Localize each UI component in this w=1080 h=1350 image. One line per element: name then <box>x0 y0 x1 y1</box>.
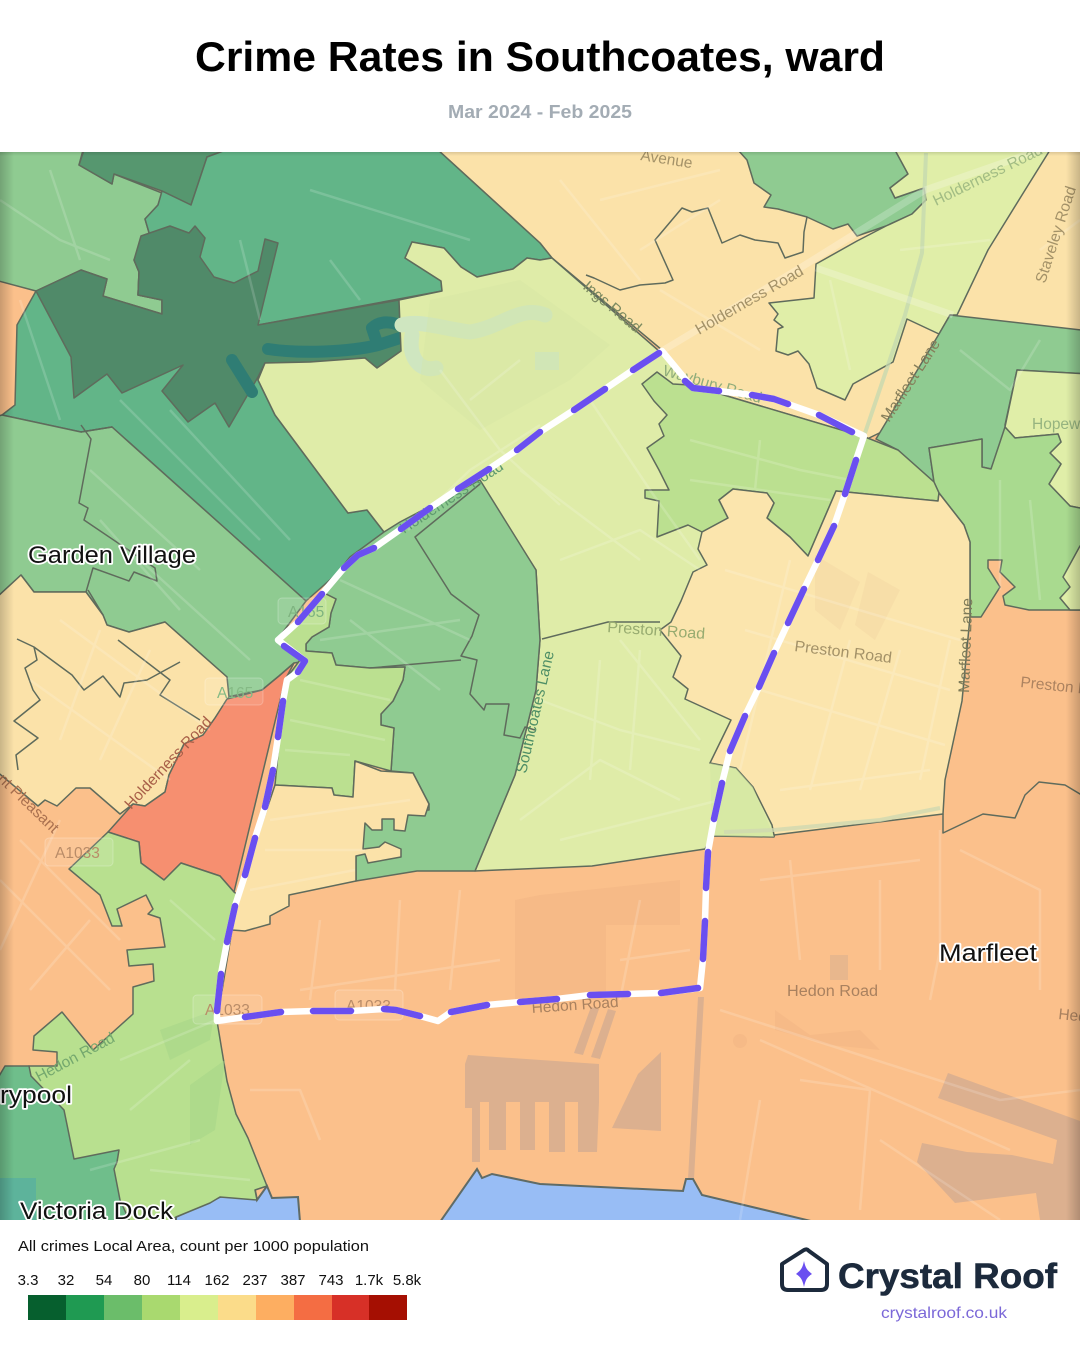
road labels: Marfleet Lane <box>956 598 976 693</box>
road labels: Holderness Road <box>930 142 1045 210</box>
legend scale labels: 5.8k <box>393 1272 422 1289</box>
road network <box>0 150 1080 1220</box>
legend scale labels: 80 <box>134 1272 150 1289</box>
legend colour swatches <box>28 1295 407 1320</box>
place labels: rypool <box>0 1082 72 1109</box>
road shield: A1033 middle: A1033 <box>346 998 391 1015</box>
road labels: Hedon Road <box>531 994 619 1017</box>
road labels: Avenue <box>639 147 694 172</box>
road shield: A1033 left <box>45 838 113 866</box>
road labels <box>0 142 1080 1086</box>
region: darkest green park core <box>36 226 401 427</box>
region: Garden Village light green <box>0 415 306 697</box>
legend scale labels: 1.7k <box>355 1272 384 1289</box>
Garden Village inner boundary <box>79 425 157 615</box>
region: ward west light green <box>275 592 405 797</box>
legend scale labels: 162 <box>204 1272 230 1289</box>
road shield: A1033 left: A1033 <box>55 845 100 862</box>
road labels: Hedon Road <box>33 1030 118 1086</box>
road shield: A165 upper <box>278 598 326 624</box>
road labels: Preston Road <box>794 638 893 667</box>
region: ward Preston Road boundary <box>542 622 660 639</box>
region: northern mid green <box>133 152 552 324</box>
place labels <box>0 542 1037 1225</box>
region: western mid green <box>2 291 384 601</box>
place labels: Garden Village <box>28 542 196 569</box>
region: south-west darker green patches <box>160 1010 225 1145</box>
road shield: A1033 junction: A1033 <box>205 1002 250 1019</box>
harbour structures on the peach area <box>465 955 1080 1220</box>
region: south-west mid green <box>0 1066 130 1222</box>
region: ward south pale darker band <box>710 763 774 837</box>
icon: house with star <box>782 1249 827 1290</box>
region: ward south-east cream <box>660 489 970 835</box>
park lake tint <box>402 313 545 369</box>
park darker meadow <box>421 305 559 376</box>
railway line through north-east <box>864 153 926 436</box>
legend scale labels: 387 <box>280 1272 306 1289</box>
top-left boundary to western mid green <box>81 427 112 432</box>
map base: peach high-crime area <box>0 152 1080 1220</box>
grey-green road along south boundary <box>724 808 940 832</box>
industrial block shading <box>515 880 880 1050</box>
road labels: Waybury Road <box>661 363 764 407</box>
legend title: All crimes Local Area, count per 1000 population <box>18 1239 369 1255</box>
region: NE light green block <box>738 150 926 236</box>
road labels: Hedon Road <box>787 983 878 1000</box>
lake in park core <box>232 322 400 392</box>
region: ward north light green <box>642 372 939 556</box>
ward boundary: white base line <box>217 351 864 1021</box>
website url: crystalroof.co.uk <box>881 1305 1008 1322</box>
region: central pale green <box>258 242 865 871</box>
region: west cream <box>0 575 229 814</box>
road labels: Marfleet Lane <box>878 336 944 425</box>
region: red-orange highest crime area <box>108 663 294 892</box>
legend scale labels: 237 <box>242 1272 268 1289</box>
region: northern internal cream boundary <box>586 208 807 290</box>
road labels: Holderness Road <box>397 458 507 537</box>
place labels: Marfleet <box>939 940 1037 967</box>
road shield: A165 upper: A165 <box>288 604 324 621</box>
road labels: Preston Road <box>607 619 706 643</box>
legend scale labels: 3.3 <box>18 1272 38 1289</box>
road shield: A165 lower: A165 <box>217 685 253 702</box>
region: ward cream pocket <box>232 761 429 931</box>
legend scale labels: 32 <box>58 1272 74 1289</box>
title: Crime Rates in Southcoates, ward <box>195 33 885 80</box>
region: Hopewell pale green <box>1005 370 1080 510</box>
place labels: Victoria Dock <box>20 1198 174 1225</box>
road labels: Ings Road <box>579 278 644 336</box>
region: dark green top piece <box>79 150 226 205</box>
ward internal boundary lines <box>370 484 535 738</box>
road labels: Holderness Road <box>692 263 807 338</box>
region: water, Humber estuary <box>176 1169 815 1222</box>
road shield: A1033 junction <box>193 995 262 1024</box>
ward boundary: purple dashes <box>217 353 856 1017</box>
region: ward mid green centre <box>306 480 540 881</box>
road shield: A1033 middle <box>335 990 403 1020</box>
region: east small pale block <box>1060 543 1080 610</box>
region: peach east wedge outline <box>943 782 1080 833</box>
legend scale labels: 54 <box>96 1272 112 1289</box>
road shield: A165 lower <box>205 678 263 705</box>
region: cream north of ward <box>438 150 1080 440</box>
cream warehouse blocks <box>815 555 900 640</box>
subtitle: date range: Mar 2024 - Feb 2025 <box>448 102 632 122</box>
legend scale labels: 743 <box>318 1272 344 1289</box>
region: east light green <box>929 427 1080 617</box>
logo wordmark: Crystal Roof <box>838 1257 1057 1296</box>
region: south-west light green <box>20 832 267 1222</box>
region: east mid green <box>876 315 1080 482</box>
legend <box>18 1239 422 1320</box>
road labels: Southcoates Lane <box>513 649 558 775</box>
logo: Crystal Roof <box>782 1249 1057 1322</box>
region: NE pale green block <box>769 150 1050 400</box>
west cream inner boundary <box>14 639 200 770</box>
legend scale labels: 114 <box>167 1272 191 1289</box>
road labels: Staveley Road <box>1033 184 1080 285</box>
region: top-left light green <box>0 150 162 314</box>
legend scale labels <box>18 1272 422 1289</box>
road labels: Holderness Road <box>121 714 216 813</box>
map edge shading <box>0 152 1080 1220</box>
